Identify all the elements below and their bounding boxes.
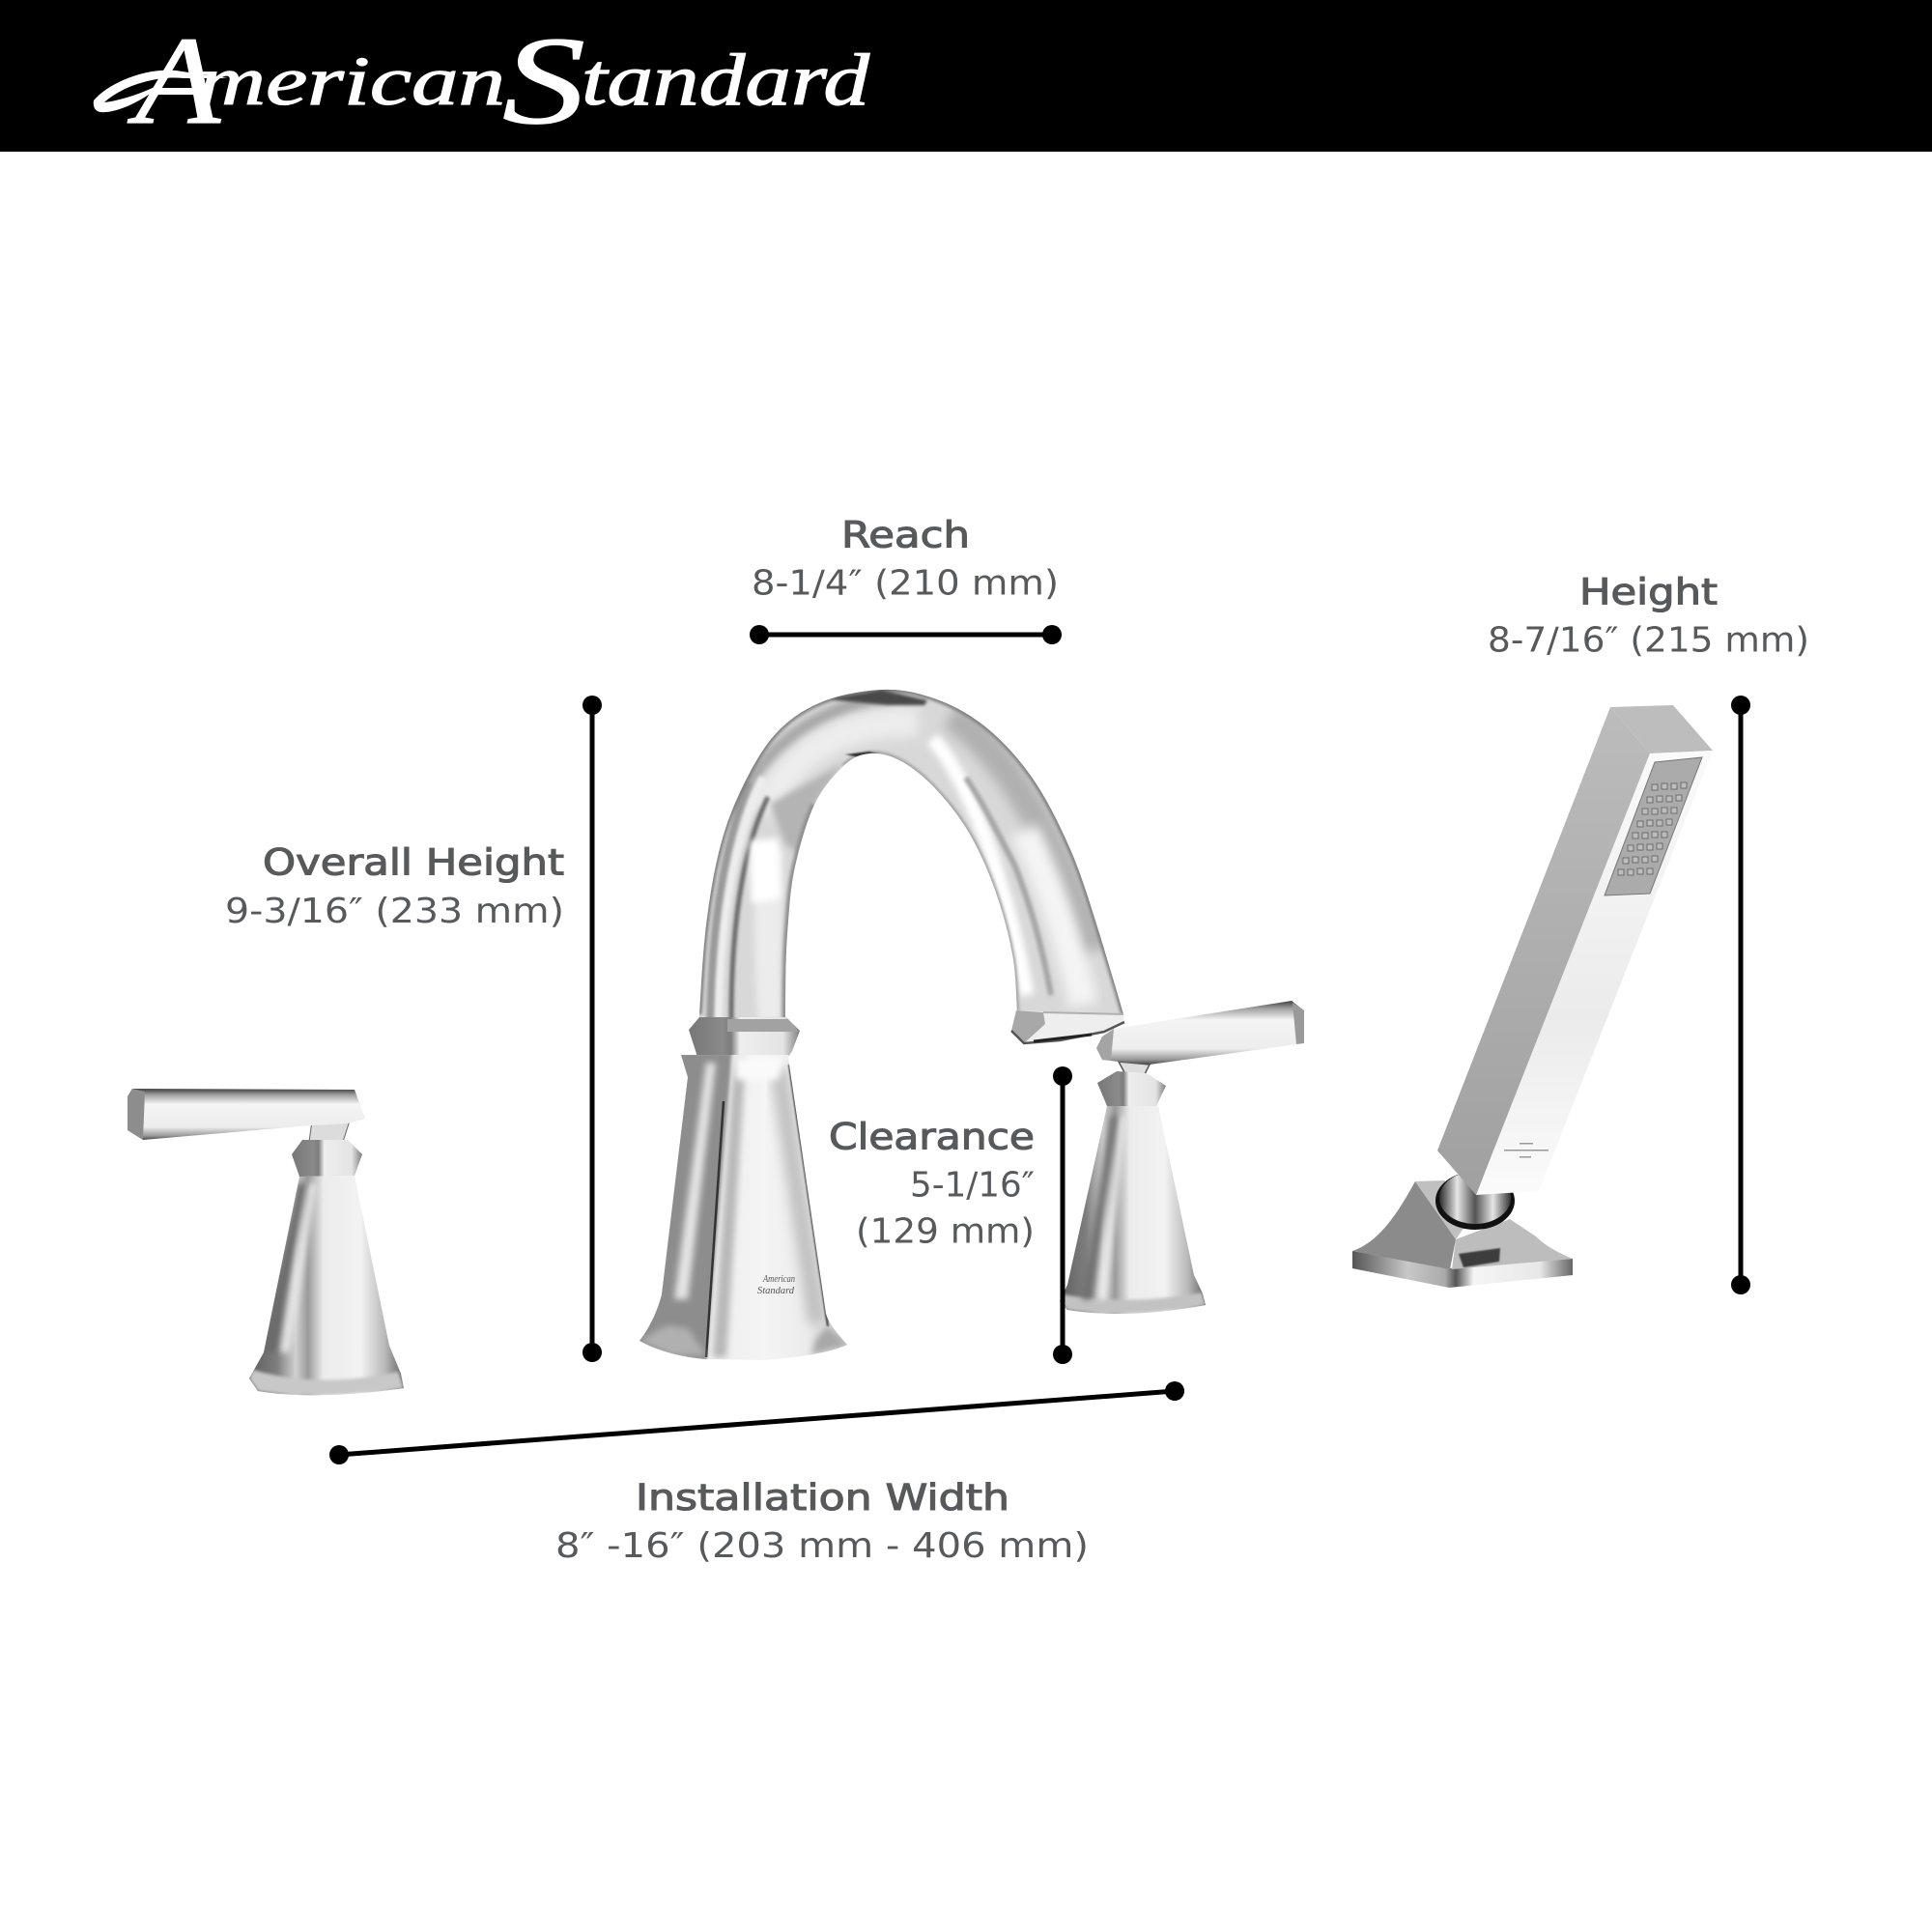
body <box>633 1053 847 1362</box>
logo wordmark: merican <box>198 43 505 120</box>
collar <box>689 1017 800 1057</box>
label: overall height <box>225 842 564 931</box>
base right face <box>1452 1219 1573 1269</box>
left handle cone <box>249 1176 404 1395</box>
nozzle <box>1011 1010 1124 1043</box>
shower handle <box>1437 705 1713 1195</box>
shower swivel <box>1435 1172 1515 1230</box>
label: reach: 8-1/4″ (210 mm) <box>752 564 1059 603</box>
base slot <box>1459 1248 1500 1267</box>
label: clearance: Clearance <box>829 1117 1035 1157</box>
label: clearance: 5-1/16″ <box>910 1165 1035 1206</box>
handle front face <box>1476 751 1713 1195</box>
label: hand shower height: 8-7/16″ (215 mm) <box>1488 620 1809 661</box>
spout faucet <box>633 690 1124 1362</box>
dimension: overall height <box>582 696 602 1362</box>
label: hand shower height <box>1488 572 1809 661</box>
label: installation width <box>555 1477 1089 1566</box>
tiny logo on spout: American <box>762 1273 795 1285</box>
left handle stem <box>309 1121 350 1142</box>
handle side face <box>1437 707 1650 1195</box>
label: reach: Reach <box>841 514 970 556</box>
dimension: hand shower height <box>1731 696 1750 1294</box>
label: clearance: (129 mm) <box>856 1211 1035 1252</box>
left handle lever <box>128 1089 365 1140</box>
right handle <box>1060 1001 1304 1314</box>
base back face <box>1415 1180 1478 1239</box>
dimension: clearance <box>1053 1066 1072 1364</box>
right handle lever <box>1096 1001 1304 1065</box>
base left face <box>1352 1181 1456 1269</box>
spout arc <box>699 690 1123 1020</box>
label: reach <box>752 514 1059 603</box>
logo swash <box>94 71 228 112</box>
base rim <box>1352 1251 1573 1288</box>
logo wordmark: tandard <box>582 40 870 121</box>
handle top face <box>1610 705 1713 753</box>
logo wordmark: A <box>127 12 221 151</box>
dimension: installation width <box>329 1381 1184 1464</box>
label: overall height: 9-3/16″ (233 mm) <box>225 892 564 931</box>
left handle <box>128 1089 404 1395</box>
right handle cap <box>1097 1071 1166 1106</box>
brand logo <box>94 12 870 151</box>
label: hand shower height: Height <box>1579 572 1718 612</box>
dimension: reach <box>750 625 1062 644</box>
label: installation width: 8″ -16″ (203 mm - 406 mm) <box>555 1526 1089 1566</box>
tiny logo line two: Standard <box>757 1285 794 1296</box>
hand shower <box>1352 705 1713 1288</box>
shower base <box>1352 1180 1573 1288</box>
label: clearance <box>829 1117 1035 1252</box>
small printed marking <box>1504 1143 1548 1157</box>
spray plate <box>1605 757 1702 895</box>
logo wordmark: S <box>502 12 585 151</box>
left handle cap <box>292 1140 362 1177</box>
label: overall height: Overall Height <box>263 842 564 883</box>
label: installation width: Installation Width <box>636 1477 1009 1519</box>
right handle stem <box>1119 1062 1150 1074</box>
header bar <box>0 0 1932 152</box>
right handle cone <box>1060 1106 1206 1314</box>
